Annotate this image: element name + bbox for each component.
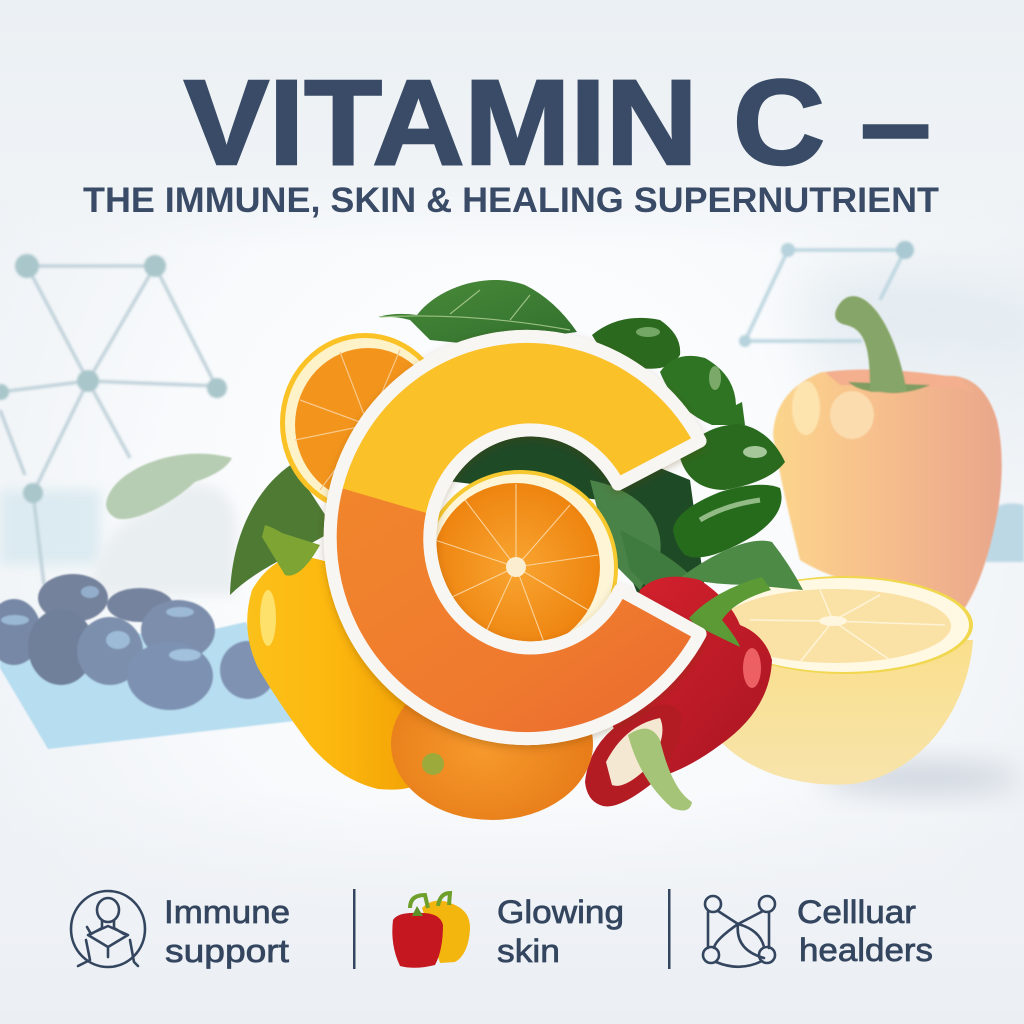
top leaf (378, 280, 577, 345)
green peppers (592, 318, 785, 558)
label: immune support: Immune (164, 894, 290, 930)
footer item: immune support (71, 891, 290, 969)
orange slice inside the C (436, 470, 618, 642)
left leaf (230, 464, 335, 595)
cut pepper half (585, 704, 692, 810)
yellow bell pepper (247, 525, 420, 790)
blurred leaf (106, 454, 232, 519)
icon: red and yellow peppers (392, 893, 470, 968)
label: immune support: support (165, 933, 289, 969)
right molecule network (739, 241, 914, 347)
subtitle: THE IMMUNE, SKIN & HEALING SUPERNUTRIENT (83, 181, 939, 220)
main fruit cluster (230, 280, 803, 820)
blue paper (0, 622, 295, 749)
blurred floor shadow under lemon (820, 762, 1020, 794)
title: VITAMIN C – (184, 54, 931, 190)
red bell pepper (600, 577, 772, 782)
icon: cell network (703, 896, 775, 967)
blurred plums (0, 574, 276, 710)
whole orange (391, 668, 593, 820)
central letter C (300, 330, 720, 760)
label: glowing skin: Glowing (497, 894, 624, 930)
orange half slice upper left (280, 333, 450, 513)
lemon half (715, 576, 973, 785)
label: cellular healders: healders (799, 932, 933, 968)
blurred white container (90, 485, 236, 595)
divider (353, 889, 356, 969)
icon: person in circle (71, 891, 145, 967)
blurred bell pepper (773, 296, 1002, 614)
divider (668, 889, 670, 969)
label: glowing skin: skin (497, 933, 560, 969)
foliage behind the C (440, 425, 803, 600)
footer item: cellular healders (703, 894, 933, 968)
footer item: glowing skin (392, 893, 624, 969)
left molecule network (0, 254, 227, 585)
label: cellular healders: Cellluar (797, 894, 916, 930)
